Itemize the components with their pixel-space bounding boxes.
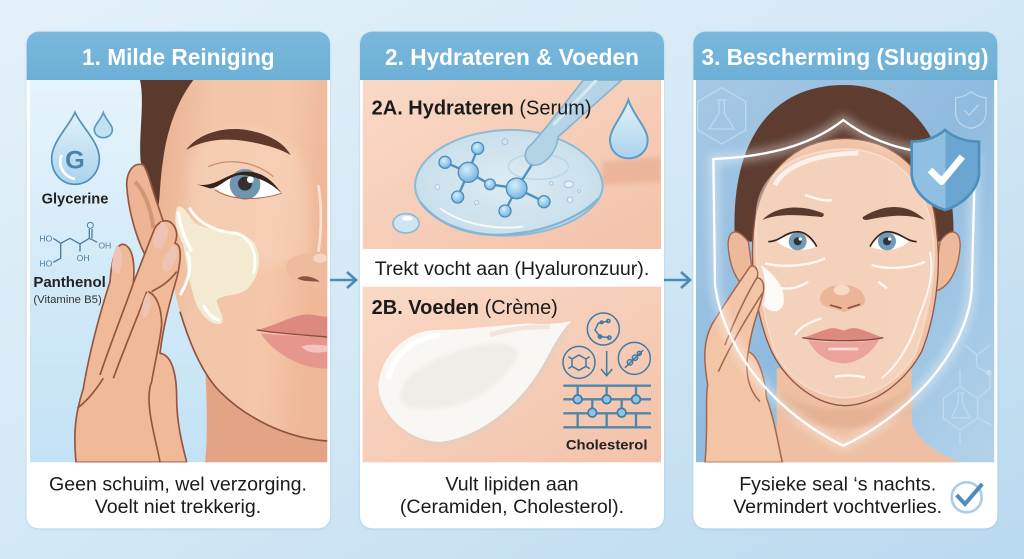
arrow: step 1 to step 2 [330, 272, 356, 288]
cream swatch [378, 321, 574, 445]
chemical structure: panthenol: HO [39, 259, 53, 269]
nose [820, 285, 865, 312]
molecule [439, 142, 550, 217]
chemical structure: panthenol: HO [39, 234, 53, 244]
icon: water drop [610, 100, 648, 158]
label: glycerine: Glycerine [42, 192, 108, 208]
caption: 2B [400, 473, 624, 518]
hand [705, 266, 782, 462]
chemical structure: panthenol [39, 222, 111, 269]
caption: step 1: Voelt niet trekkerig. [95, 496, 261, 518]
header: step 3: 3. Bescherming (Slugging) [701, 44, 989, 70]
caption: step 3 [733, 473, 942, 518]
icon: glycerine drop: G [65, 146, 85, 174]
face [752, 138, 938, 406]
header: step 1 [27, 32, 330, 80]
occlusive slug layer [756, 149, 934, 398]
caption: 2A: Trekt vocht aan (Hyaluronzuur). [375, 258, 649, 280]
heading: 2B: 2B. Voeden (Crème) [372, 297, 558, 319]
panel: step 1 mild cleansing [27, 32, 330, 528]
chemical structure: panthenol: OH [98, 240, 111, 250]
eyes [768, 232, 917, 250]
header: step 2 [360, 32, 664, 80]
neck [777, 368, 960, 462]
label: vitamine B5: (Vitamine B5) [33, 294, 102, 306]
icon: lipid molecules in circles [563, 313, 650, 378]
ears [727, 231, 752, 282]
arrow: step 2 to step 3 [664, 272, 690, 288]
step 3 illustration [696, 80, 994, 462]
sub-panel: 2B nourish cream [363, 287, 661, 462]
header: step 1: 1. Milde Reiniging [82, 44, 275, 70]
sub-panel: 2A hydrate serum [363, 80, 661, 249]
heading: 2A: 2A. Hydrateren (Serum) [372, 97, 592, 119]
caption: step 1: Geen schuim, wel verzorging. [49, 473, 307, 495]
caption: step 1 [49, 473, 307, 518]
caption: step 3: Vermindert vochtverlies. [733, 496, 942, 518]
step 1 illustration [30, 80, 327, 462]
chemical structure: panthenol: OH [77, 253, 90, 263]
cream on cheek [175, 206, 259, 324]
caption: 2B: (Ceramiden, Cholesterol). [400, 496, 624, 518]
header: step 3 [693, 32, 997, 80]
hair [734, 85, 954, 242]
label: panthenol: Panthenol [33, 274, 106, 291]
panel: step 3 protection slugging [693, 32, 997, 528]
lips [802, 328, 883, 363]
icon: check circle [952, 482, 982, 512]
pipette [525, 80, 622, 165]
panel: step 2 hydrate and nourish [360, 32, 664, 528]
caption: 2B: Vult lipiden aan [445, 473, 579, 495]
glowing shield outline [713, 120, 975, 446]
eyebrows [762, 207, 925, 220]
header: step 2: 2. Hydrateren & Voeden [385, 44, 639, 70]
serum pool [415, 130, 603, 236]
background hexagons and icons [698, 88, 992, 445]
icon: glycerine drop [52, 112, 112, 184]
icon: lipid barrier grid [563, 386, 651, 427]
label: cholesterol: Cholesterol [566, 436, 647, 452]
icon: shield with check [912, 130, 979, 210]
small droplet [393, 214, 419, 233]
caption: step 3: Fysieke seal ‘s nachts. [739, 473, 936, 495]
hand applying product [75, 221, 190, 462]
